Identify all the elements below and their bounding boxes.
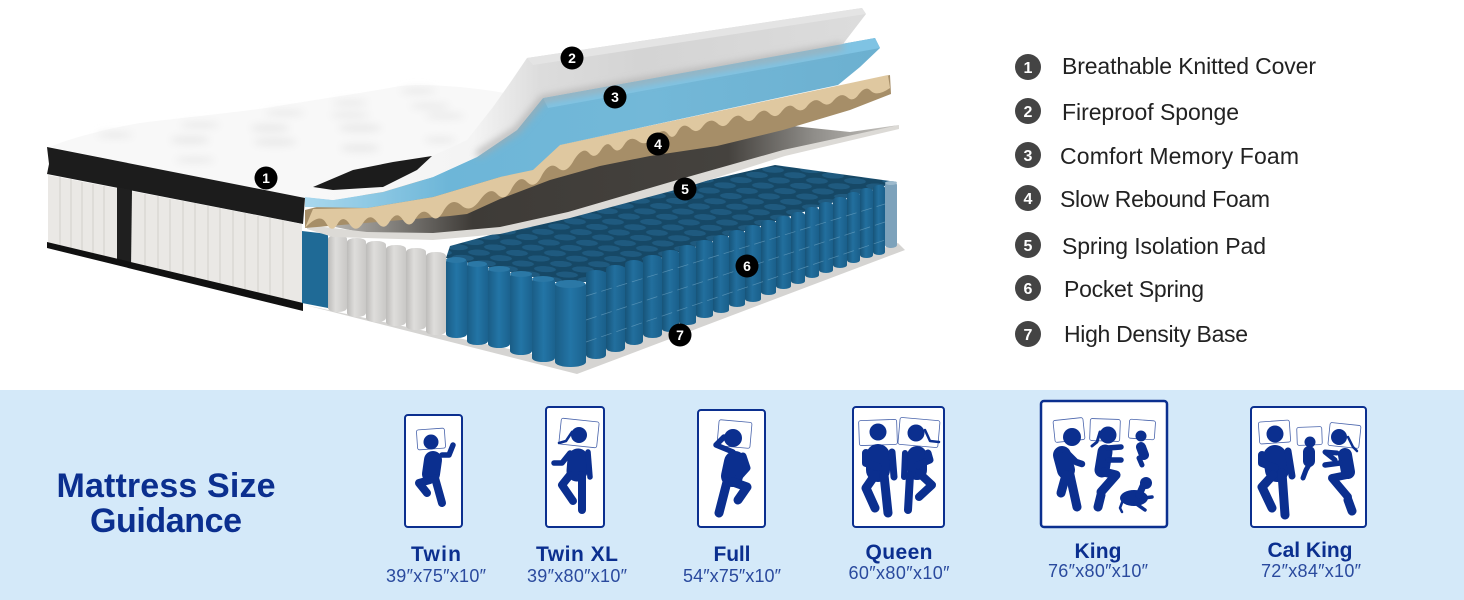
pocket spring rows	[446, 181, 897, 367]
size card: Twin	[386, 415, 487, 586]
size card: King	[1041, 401, 1167, 581]
number badge 6: 6	[743, 258, 751, 274]
Twin XL label: Twin XL	[536, 543, 618, 566]
Twin label: 39″x75″x10″	[386, 566, 487, 586]
Cal King label	[1261, 539, 1362, 581]
Full label: 54″x75″x10″	[683, 566, 782, 586]
number badge 1	[254, 166, 278, 190]
opening under peeled cover	[313, 156, 432, 190]
legend item 7: High Density Base	[1064, 321, 1248, 347]
mattress cutaway illustration	[47, 8, 905, 374]
number badge 2: 2	[568, 50, 576, 66]
Twin label	[386, 543, 487, 586]
legend item 6: 6	[1024, 281, 1033, 298]
legend of mattress layers	[1015, 53, 1316, 347]
King label	[1048, 540, 1149, 581]
comfort memory foam	[305, 38, 880, 208]
fireproof sponge layer	[305, 8, 866, 200]
size card: Twin XL	[527, 407, 628, 586]
spring isolation pad	[307, 125, 899, 240]
size card: Queen	[848, 407, 950, 583]
blue spring sliver at corner	[302, 231, 328, 308]
heading: Guidance	[90, 502, 242, 540]
number badge 7: 7	[676, 327, 684, 343]
King label: 76″x80″x10″	[1048, 561, 1149, 581]
number badge 7	[668, 324, 692, 346]
number badge 4	[646, 132, 670, 156]
number badge 6	[736, 254, 758, 278]
Queen label: 60″x80″x10″	[848, 563, 950, 583]
size card: Cal King	[1251, 407, 1366, 581]
number badge 4: 4	[654, 136, 662, 152]
quilted top black band	[47, 147, 305, 224]
legend item 5: Spring Isolation Pad	[1062, 233, 1266, 259]
legend item 4: Slow Rebound Foam	[1060, 186, 1270, 212]
legend item 4: 4	[1024, 191, 1033, 208]
side panel with stripes	[47, 175, 303, 311]
Queen label	[848, 541, 950, 583]
Twin XL label	[527, 543, 628, 586]
number badge 3	[604, 86, 626, 108]
sleeper icon: parents with child	[1258, 420, 1361, 515]
Cal King label: 72″x84″x10″	[1261, 561, 1362, 581]
number badge 2	[560, 46, 584, 70]
size guidance band	[0, 390, 1464, 600]
high density base layer	[305, 243, 905, 374]
spring tops	[446, 165, 897, 282]
sleeper icon: woman	[554, 418, 599, 510]
legend item 5: 5	[1024, 238, 1033, 255]
number badge 5: 5	[681, 181, 689, 197]
Twin XL label: 39″x80″x10″	[527, 566, 628, 586]
cover top surface	[50, 85, 510, 205]
Queen label: Queen	[866, 541, 932, 564]
legend item 3: Comfort Memory Foam	[1060, 143, 1299, 169]
Twin label: Twin	[411, 543, 461, 566]
legend item 6: Pocket Spring	[1064, 276, 1204, 302]
King label: King	[1074, 540, 1122, 563]
dog	[1120, 477, 1152, 512]
slow rebound foam	[305, 75, 891, 229]
sleeper icon: single sleeper	[416, 428, 453, 503]
legend item 7: 7	[1024, 327, 1033, 344]
number badge 3: 3	[611, 89, 619, 105]
legend item 1: 1	[1024, 60, 1033, 77]
sleeper icon: couple	[859, 417, 940, 513]
legend item 2: 2	[1024, 104, 1033, 121]
Full label: Full	[714, 543, 750, 566]
heading: Mattress Size	[56, 467, 276, 505]
sleeper icon: man with raised arm	[716, 420, 752, 513]
number badge 5	[674, 178, 696, 200]
size card: Full	[683, 410, 782, 586]
legend item 3: 3	[1024, 148, 1033, 165]
sleeper icon: family with dog	[1053, 417, 1156, 512]
Full label	[683, 543, 782, 586]
legend item 2: Fireproof Sponge	[1062, 99, 1239, 125]
legend item 1: Breathable Knitted Cover	[1062, 53, 1316, 79]
heading	[56, 467, 276, 540]
Cal King label: Cal King	[1268, 539, 1352, 562]
number badge 1: 1	[262, 170, 270, 186]
white pocket springs	[328, 235, 446, 335]
